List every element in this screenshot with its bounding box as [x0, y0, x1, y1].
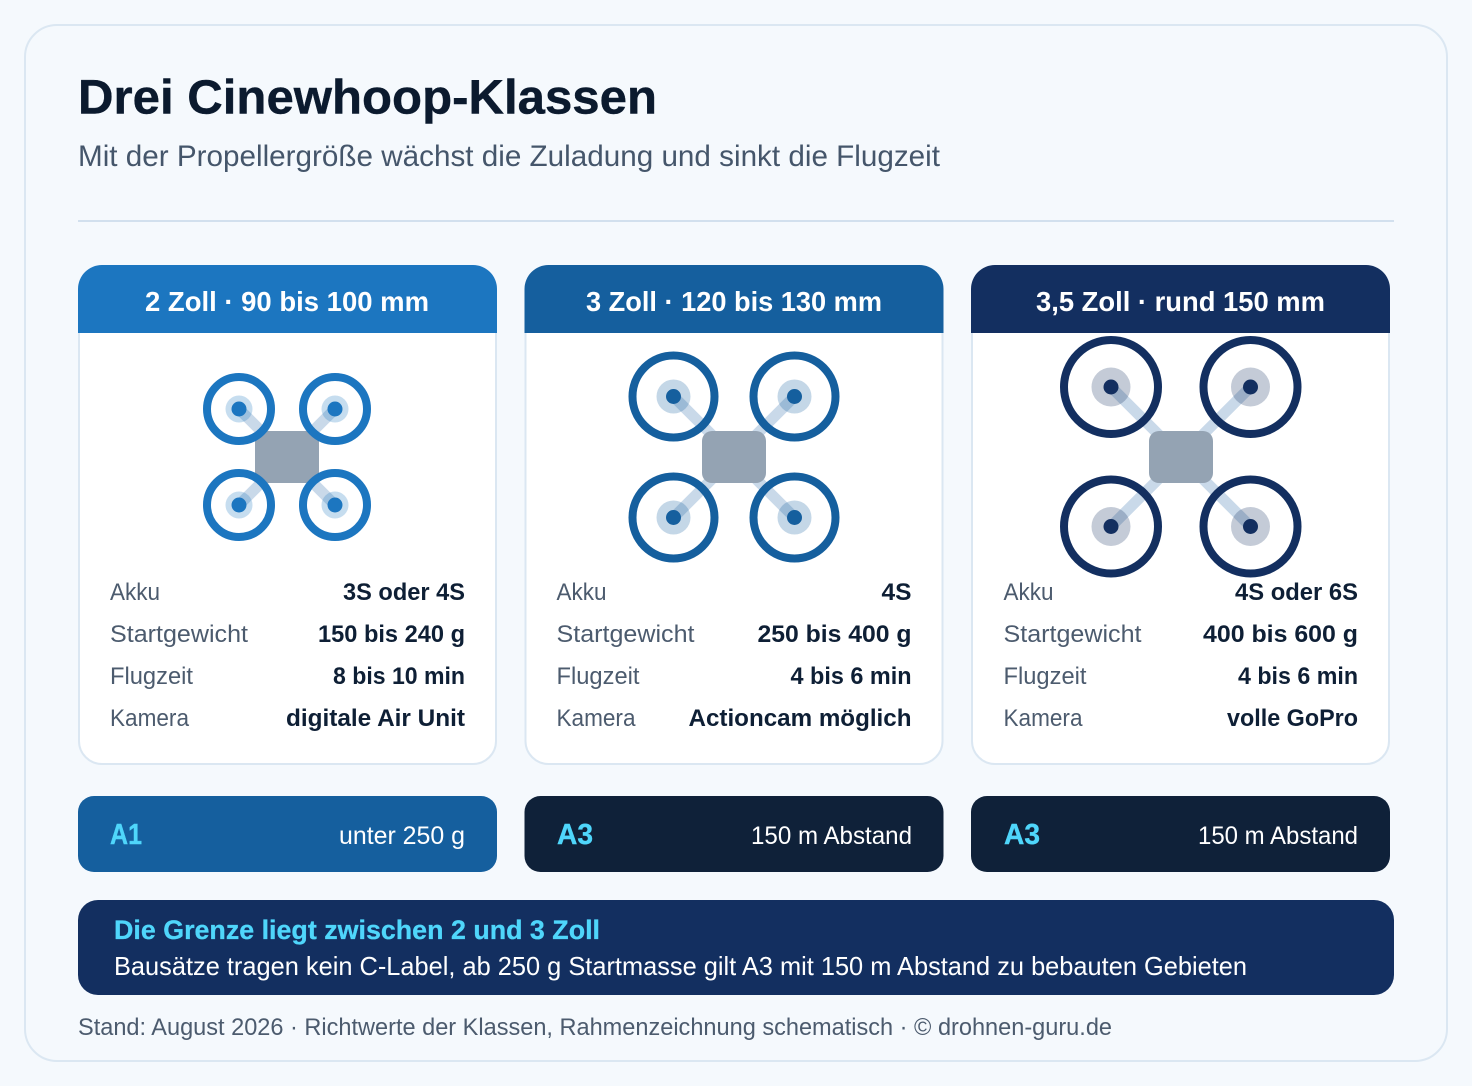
footer note: Stand: August 2026 · Richtwerte der Klassen, Rahmenzeichnung schematisch · © drohnen-guru.de: [78, 1014, 1112, 1041]
badge: A3 middle: A3: [557, 819, 593, 851]
spec table: 3,5 Zoll: 4 bis 6 min: [1238, 663, 1358, 690]
spec table: 3,5 Zoll: Flugzeit: [1004, 663, 1087, 690]
spec table: 2 Zoll: Kamera: [110, 705, 190, 732]
badge: A3 middle: [524, 796, 944, 872]
badge: A3 right: A3: [1004, 819, 1040, 851]
header: 3 Zoll: 3 Zoll · 120 bis 130 mm: [586, 286, 882, 317]
badge: A1: unter 250 g: [339, 822, 465, 850]
panel: 3 Zoll class: [524, 265, 944, 764]
spec table: 3,5 Zoll: Akku: [1004, 579, 1054, 606]
callout: weight limit: Bausätze tragen kein C-Label, ab 250 g Startmasse gilt A3 mit 150 m Abstand zu bebauten Gebieten: [114, 951, 1247, 981]
spec table: 2 Zoll: digitale Air Unit: [286, 705, 465, 732]
panel: 3,5 Zoll class: [971, 265, 1390, 764]
spec table: 3,5 Zoll: 400 bis 600 g: [1203, 621, 1358, 648]
icon: large drone frame: [1064, 340, 1298, 574]
icon: small drone frame: [207, 377, 367, 537]
spec table: 2 Zoll: 3S oder 4S: [343, 579, 465, 606]
title: Drei Cinewhoop-Klassen: [78, 72, 657, 124]
badge: A1: [78, 796, 497, 872]
spec table: 2 Zoll: 150 bis 240 g: [318, 621, 465, 648]
panel: 2 Zoll class: [78, 265, 497, 764]
spec table: 2 Zoll: Akku: [110, 579, 160, 606]
spec table: 3 Zoll: Flugzeit: [556, 663, 640, 690]
spec table: 3 Zoll: Actioncam möglich: [688, 705, 912, 732]
badge: A3 right: [971, 796, 1390, 872]
callout: weight limit: [78, 900, 1394, 995]
header: 2 Zoll: [78, 265, 497, 333]
spec table: 3 Zoll: 250 bis 400 g: [758, 621, 912, 648]
badge: A1: A1: [110, 819, 142, 851]
header: 3 Zoll: [524, 265, 944, 333]
header: 3,5 Zoll: 3,5 Zoll · rund 150 mm: [1036, 286, 1325, 317]
header: 3,5 Zoll: [971, 265, 1390, 333]
badge: A3 right: 150 m Abstand: [1198, 822, 1358, 850]
spec table: 3 Zoll: 4S: [882, 579, 912, 606]
spec table: 2 Zoll: Flugzeit: [110, 663, 193, 690]
spec table: 3,5 Zoll: [1004, 579, 1358, 732]
header: 2 Zoll: 2 Zoll · 90 bis 100 mm: [145, 286, 429, 317]
subtitle: Mit der Propellergröße wächst die Zuladung und sinkt die Flugzeit: [78, 140, 941, 173]
spec table: 3 Zoll: Startgewicht: [556, 621, 695, 648]
spec table: 3 Zoll: Akku: [556, 579, 606, 606]
spec table: 2 Zoll: 8 bis 10 min: [333, 663, 465, 690]
spec table: 3,5 Zoll: Kamera: [1004, 705, 1083, 732]
spec table: 3,5 Zoll: Startgewicht: [1004, 621, 1142, 648]
spec table: 2 Zoll: Startgewicht: [110, 621, 248, 648]
badge: A3 middle: 150 m Abstand: [751, 822, 912, 850]
callout: weight limit: Die Grenze liegt zwischen 2 und 3 Zoll: [114, 915, 600, 945]
spec table: 3 Zoll: 4 bis 6 min: [790, 663, 912, 690]
spec table: 2 Zoll: [110, 579, 465, 732]
spec table: 3,5 Zoll: volle GoPro: [1227, 705, 1358, 732]
icon: medium drone frame: [632, 356, 836, 558]
spec table: 3,5 Zoll: 4S oder 6S: [1235, 579, 1358, 606]
spec table: 3 Zoll: Kamera: [556, 705, 636, 732]
spec table: 3 Zoll: [556, 579, 912, 732]
